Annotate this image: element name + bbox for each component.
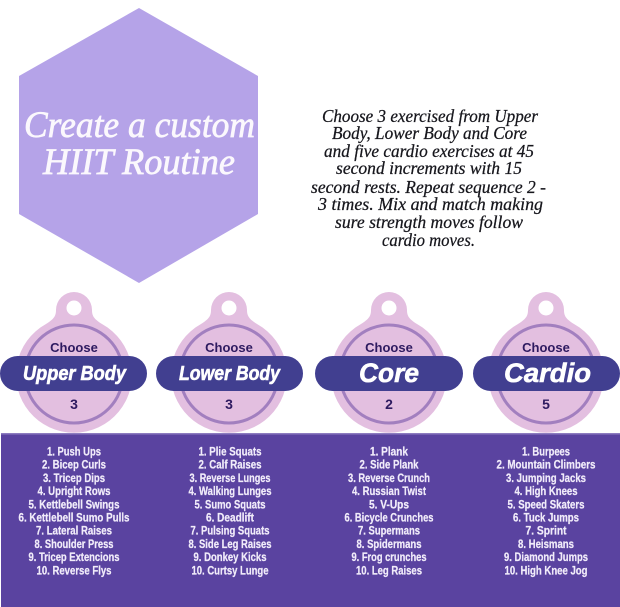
list: core exercises xyxy=(344,444,434,577)
list: upper body exercises: 2. Bicep Curls xyxy=(42,458,106,472)
title: Create a custom xyxy=(24,105,255,146)
list: upper body exercises: 5. Kettlebell Swings xyxy=(28,497,120,511)
tag: core xyxy=(315,292,463,433)
list: core exercises: 3. Reverse Crunch xyxy=(348,471,430,485)
list: upper body exercises: 4. Upright Rows xyxy=(38,484,111,498)
list: core exercises: 7. Supermans xyxy=(358,524,420,538)
instructions text block xyxy=(311,106,546,250)
list: cardio exercises: 9. Diamond Jumps xyxy=(504,550,588,564)
tag: upper body xyxy=(0,292,147,433)
list: core exercises: 8. Spidermans xyxy=(356,537,422,551)
list: cardio exercises: 2. Mountain Climbers xyxy=(496,458,596,472)
tag: cardio xyxy=(473,292,620,433)
list: upper body exercises: 8. Shoulder Press xyxy=(34,537,114,551)
list: core exercises: 4. Russian Twist xyxy=(352,484,426,498)
list: lower body exercises: 10. Curtsy Lunge xyxy=(192,563,269,577)
instructions text block: Body, Lower Body and Core xyxy=(332,123,527,143)
list: cardio exercises: 4. High Knees xyxy=(514,484,578,498)
list: cardio exercises: 7. Sprint xyxy=(526,524,566,538)
list: lower body exercises: 5. Sumo Squats xyxy=(194,497,266,511)
list: lower body exercises: 9. Donkey Kicks xyxy=(194,550,267,564)
list: upper body exercises: 1. Push Ups xyxy=(47,444,101,458)
list: cardio exercises: 8. Heismans xyxy=(518,537,574,551)
list: lower body exercises: 3. Reverse Lunges xyxy=(190,471,271,485)
tag: lower body: Choose xyxy=(205,340,253,355)
tag: upper body: Choose xyxy=(50,340,98,355)
tag: upper body: Upper Body xyxy=(23,363,127,385)
panel: title hexagon xyxy=(19,8,258,283)
tag: cardio: Cardio xyxy=(504,358,591,388)
tag: lower body xyxy=(156,292,303,433)
list: core exercises: 9. Frog crunches xyxy=(352,550,427,564)
list: core exercises: 10. Leg Raises xyxy=(356,563,422,577)
list: upper body exercises: 6. Kettlebell Sumo Pulls xyxy=(18,510,130,524)
list: upper body exercises: 3. Tricep Dips xyxy=(43,471,105,485)
tag: core: Choose xyxy=(365,340,413,355)
instructions text block: and five cardio exercises at 45 xyxy=(324,141,534,161)
list: core exercises: 5. V-Ups xyxy=(369,497,409,511)
list: lower body exercises: 1. Plie Squats xyxy=(198,444,262,458)
list: lower body exercises: 7. Pulsing Squats xyxy=(190,524,270,538)
list: upper body exercises xyxy=(18,444,130,577)
instructions text block: 3 times. Mix and match making xyxy=(317,194,543,214)
list: cardio exercises: 10. High Knee Jog xyxy=(504,563,588,577)
panel: exercise lists xyxy=(1,433,620,607)
list: cardio exercises: 6. Tuck Jumps xyxy=(513,510,579,524)
list: core exercises: 1. Plank xyxy=(370,444,408,458)
tag: core: 2 xyxy=(385,396,393,412)
list: core exercises: 2. Side Plank xyxy=(360,458,419,472)
list: upper body exercises: 10. Reverse Flys xyxy=(36,563,112,577)
title xyxy=(24,105,255,183)
instructions text block: second rests. Repeat sequence 2 - xyxy=(311,177,546,197)
list: lower body exercises: 8. Side Leg Raises xyxy=(188,537,272,551)
list: lower body exercises: 2. Calf Raises xyxy=(198,458,262,472)
title: HIIT Routine xyxy=(42,142,235,183)
tag: upper body: 3 xyxy=(70,396,78,412)
list: upper body exercises: 9. Tricep Extencions xyxy=(28,550,120,564)
instructions text block: cardio moves. xyxy=(382,230,475,250)
list: cardio exercises: 5. Speed Skaters xyxy=(508,497,585,511)
list: cardio exercises: 1. Burpees xyxy=(522,444,570,458)
list: cardio exercises xyxy=(496,444,596,577)
list: lower body exercises: 6. Deadlift xyxy=(206,510,254,524)
tag: core: Core xyxy=(359,358,419,388)
tag: lower body: 3 xyxy=(225,396,233,412)
list: lower body exercises: 4. Walking Lunges xyxy=(188,484,272,498)
tag: cardio: 5 xyxy=(542,396,550,412)
instructions text block: Choose 3 exercised from Upper xyxy=(322,106,539,126)
tag: cardio: Choose xyxy=(522,340,570,355)
list: core exercises: 6. Bicycle Crunches xyxy=(344,510,434,524)
instructions text block: second increments with 15 xyxy=(336,158,522,178)
instructions text block: sure strength moves follow xyxy=(335,212,523,232)
list: lower body exercises xyxy=(188,444,272,577)
tag: lower body: Lower Body xyxy=(179,363,281,385)
list: cardio exercises: 3. Jumping Jacks xyxy=(506,471,586,485)
list: upper body exercises: 7. Lateral Raises xyxy=(36,524,112,538)
